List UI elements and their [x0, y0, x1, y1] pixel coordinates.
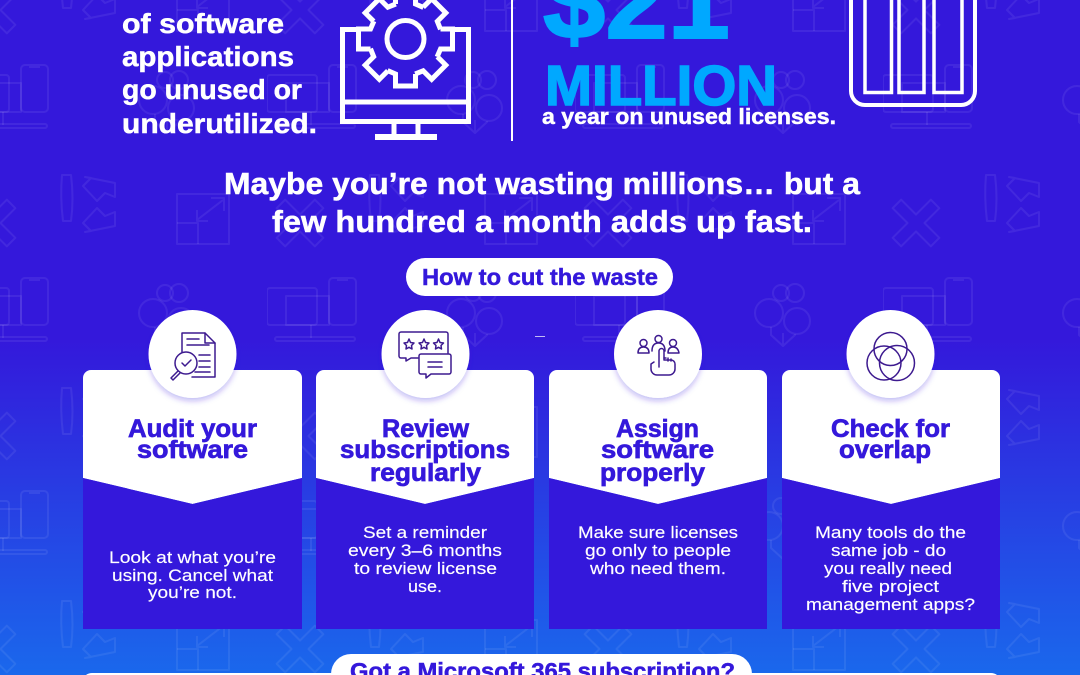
icon: columns in rounded frame: [851, 0, 975, 105]
statistic: unused applications text: underutilized.: [122, 108, 317, 139]
message heading: few hundred a month adds up fast.: [272, 204, 812, 239]
bottom panel edge: [84, 673, 999, 675]
card: check for overlap: [782, 310, 1000, 629]
pill: how to cut the waste: [406, 258, 673, 296]
icon: document with magnifier: [148, 310, 236, 398]
card: review subscriptions regularly: Set a reminder: [363, 523, 487, 542]
card: check for overlap: same job - do: [831, 541, 946, 560]
statistic: unused applications text: [122, 8, 317, 139]
card: review subscriptions regularly: use.: [408, 577, 442, 596]
card: check for overlap: Many tools do the: [815, 523, 966, 542]
card: assign software properly: software: [601, 436, 714, 464]
statistic: unused applications text: go unused or: [122, 74, 302, 105]
statistic: $21 million: [542, 0, 836, 129]
card: review subscriptions regularly: subscriptions: [340, 436, 510, 464]
icon: overlapping circles: [846, 310, 934, 398]
card: check for overlap: management apps?: [806, 595, 975, 614]
card: check for overlap: you really need: [824, 559, 952, 578]
card: assign software properly: go only to people: [585, 541, 731, 560]
icon: people and pointing hand: [614, 310, 702, 398]
card: review subscriptions regularly: every 3–6 months: [348, 541, 502, 560]
card: audit your software: Audit your: [128, 415, 257, 443]
card: assign software properly: [549, 310, 767, 629]
icon: rating and message bubbles: [382, 310, 470, 398]
card: assign software properly: properly: [600, 459, 705, 487]
statistic: $21 million: MILLION: [545, 54, 777, 118]
card: assign software properly: Make sure licenses: [578, 523, 738, 542]
statistic: $21 million: a year on unused licenses.: [542, 104, 836, 129]
card: audit your software: [83, 310, 302, 629]
card: assign software properly: who need them.: [589, 559, 726, 578]
card: check for overlap: overlap: [839, 436, 931, 464]
pill: how to cut the waste: How to cut the waste: [422, 264, 658, 290]
card: audit your software: using. Cancel what: [112, 566, 273, 585]
card: review subscriptions regularly: Review: [382, 415, 470, 443]
card: assign software properly: Assign: [616, 415, 699, 443]
card: check for overlap: Check for: [831, 415, 950, 443]
card: audit your software: software: [137, 436, 248, 464]
icon: monitor with gear: [342, 0, 468, 137]
card: audit your software: you’re not.: [148, 583, 237, 602]
statistic: unused applications text: of software: [122, 8, 284, 39]
card: review subscriptions regularly: to review license: [354, 559, 497, 578]
message heading: Maybe you’re not wasting millions… but a: [224, 166, 861, 201]
message heading: [224, 166, 861, 239]
card: review subscriptions regularly: [316, 310, 534, 629]
card: review subscriptions regularly: regularly: [370, 459, 481, 487]
card: check for overlap: five project: [842, 577, 939, 596]
card: audit your software: Look at what you’re: [109, 548, 276, 567]
statistic: unused applications text: applications: [122, 41, 294, 72]
